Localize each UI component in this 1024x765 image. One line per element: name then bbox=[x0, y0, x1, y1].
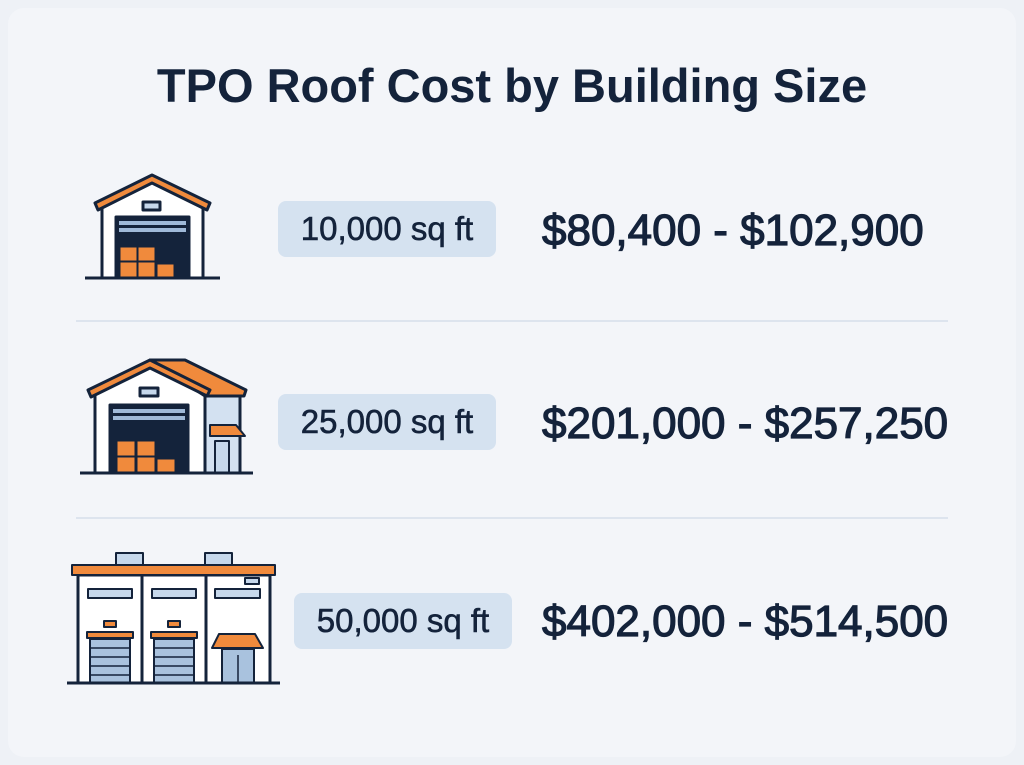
price 2: $201,000 - $257,250 bbox=[542, 399, 948, 448]
pill: 25,000: 25,000 sq ft bbox=[301, 403, 473, 440]
icon: large warehouse bbox=[67, 553, 280, 683]
pill: 50,000: 50,000 sq ft bbox=[317, 602, 489, 639]
icon: medium warehouse bbox=[80, 360, 253, 473]
pill: 10,000: 10,000 sq ft bbox=[301, 210, 473, 247]
price 1: $80,400 - $102,900 bbox=[542, 206, 924, 255]
pill: 10,000 bbox=[278, 201, 496, 257]
pill: 50,000 bbox=[294, 593, 512, 649]
pill: 25,000 bbox=[278, 394, 496, 450]
price 3: $402,000 - $514,500 bbox=[542, 597, 948, 646]
icon: small warehouse bbox=[85, 175, 220, 278]
title: TPO Roof Cost by Building Size bbox=[157, 59, 867, 112]
